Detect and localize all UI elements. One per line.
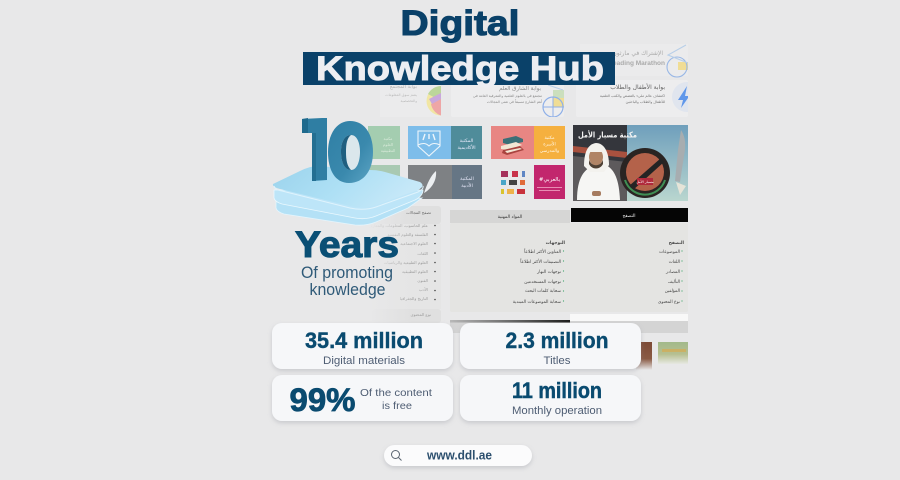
icon: lightning bolt bbox=[672, 82, 688, 112]
subheading: Of promoting knowledge bbox=[301, 264, 393, 299]
icon: circle chart marathon bbox=[667, 45, 688, 77]
panel: browse links: توجهات المستخدمين bbox=[524, 280, 562, 285]
faded top service cards: مجتمع في بالعلوم العلمية والمعرفية العامة في bbox=[473, 94, 542, 99]
platform bbox=[273, 166, 423, 225]
tile: academic library bbox=[408, 126, 482, 159]
numeral 10 bbox=[302, 118, 373, 183]
thumbnails row bbox=[636, 342, 688, 370]
lower tabs strip bbox=[450, 314, 688, 333]
tile: green partial bottom bbox=[368, 165, 400, 199]
faded top service cards: يضم سوق المعلومات bbox=[385, 93, 417, 97]
tile: green partial top bbox=[368, 126, 400, 159]
faded top service cards: للأطفال والطلاب والباحثين bbox=[626, 99, 665, 104]
tile: green partial top: التطبيقية bbox=[381, 148, 395, 153]
panel: browse links: الموضوعات bbox=[659, 250, 680, 255]
subheading: Of promoting knowledge: knowledge bbox=[310, 281, 386, 299]
card: 35.4 million digital materials: 35.4 million bbox=[305, 328, 423, 353]
card: 99% of the content is free: is free bbox=[382, 400, 412, 412]
card: 11 million monthly operation bbox=[460, 375, 641, 421]
tabs: التصفح bbox=[622, 214, 636, 219]
panel: browse links: التأليف bbox=[668, 278, 680, 285]
icon: circle chart history bbox=[543, 85, 564, 117]
icon: magnifier bbox=[392, 450, 402, 460]
tile: Hope Probe library: مكتبة مسبار الأمل bbox=[578, 130, 637, 140]
faded top service cards: Reading Marathon bbox=[608, 60, 665, 67]
panel: browse links: التصفح bbox=[669, 241, 685, 246]
card: 35.4 million digital materials: Digital materials bbox=[323, 355, 406, 367]
sidebar: subject list: علم الحاسوب، المعلومات والمعارف bbox=[368, 223, 428, 228]
panel: browse links: نوع المحتوى bbox=[658, 300, 680, 305]
panel: browse links: اللغات bbox=[669, 260, 680, 265]
card: 99% of the content is free bbox=[272, 375, 453, 421]
card: 2.3 million titles: Titles bbox=[544, 355, 571, 367]
tabs bbox=[450, 208, 688, 223]
panel: browse links: سحابة الموضوعات المبتدية bbox=[513, 300, 561, 305]
faded top service cards: اكتشاف عالم مليء بالقصص والكتب العلمية bbox=[600, 94, 665, 98]
title: Digital: Digital bbox=[400, 4, 520, 43]
panel: browse links: توجهات النهار bbox=[536, 270, 562, 275]
tile: green partial top: مكتبة bbox=[384, 136, 392, 141]
panel: browse links: التصنيفات الأكثر اطلاعاً bbox=[520, 258, 561, 265]
heading: Years: Years bbox=[295, 224, 399, 265]
card: 35.4 million digital materials bbox=[272, 323, 453, 369]
subheading: Of promoting knowledge: Of promoting bbox=[301, 264, 393, 282]
sidebar: subject list: العلوم الاجتماعية bbox=[400, 241, 428, 246]
faded top service cards: والتخصصية bbox=[401, 99, 417, 103]
tile: academic library: المكتبة bbox=[460, 138, 473, 144]
tile: family library: مكتبة bbox=[544, 135, 555, 141]
icon: 3D number 10 on platform bbox=[273, 118, 423, 225]
tile: family library: والمدرسي bbox=[540, 149, 559, 154]
sidebar: subject list: الفنون bbox=[417, 278, 428, 283]
sidebar: subject list: الأدب bbox=[419, 287, 428, 292]
sidebar: subject list bbox=[368, 204, 441, 324]
panel: browse links: سحابة كلمات البحث bbox=[525, 288, 561, 294]
tile: family library: الأسرة bbox=[543, 140, 556, 148]
tile: literary library: المكتبة bbox=[460, 176, 474, 182]
search bar: www.ddl.ae: www.ddl.ae bbox=[426, 448, 492, 462]
tile: literary library: الأدبية bbox=[461, 182, 473, 189]
sidebar: subject list: العلوم الطبيعية والرياضيات bbox=[384, 260, 428, 265]
title banner: Knowledge Hub: Knowledge Hub bbox=[316, 50, 604, 88]
tile: family library bbox=[491, 126, 565, 159]
panel: browse links: التوجهات bbox=[546, 241, 566, 246]
tile: academic library: الأكاديمية bbox=[457, 144, 476, 151]
tile: literary library bbox=[408, 165, 482, 199]
sidebar: subject list: نوع المحتوى bbox=[411, 312, 431, 317]
tile: green partial top: العلوم bbox=[383, 142, 393, 147]
panel: website screenshot bbox=[368, 44, 702, 370]
card: 2.3 million titles: 2.3 million bbox=[506, 328, 608, 353]
panel: browse links: المصادر bbox=[665, 270, 680, 275]
panel: browse links: العناوين الأكثر اطلاعاً bbox=[524, 248, 561, 255]
tabs: المواد المهنية bbox=[498, 215, 522, 220]
panel: browse links: المؤلفين bbox=[665, 289, 680, 294]
icon: pie chart bbox=[426, 86, 441, 116]
tile: Arabic apps bbox=[501, 165, 565, 199]
sidebar: subject list: العلوم التطبيقية bbox=[402, 269, 428, 274]
tile: Hope Probe library: مسبار الأمل bbox=[636, 179, 654, 184]
sidebar: subject list: اللغات bbox=[417, 251, 428, 256]
tile: Arabic apps: ‎#بالعربي bbox=[539, 177, 561, 183]
card: 99% of the content is free: Of the content bbox=[360, 387, 432, 399]
panel: browse links bbox=[450, 223, 688, 312]
faded top service cards: بوابة الشارق العلم bbox=[499, 86, 541, 92]
faded top service cards: بوابة المجتمع bbox=[390, 84, 417, 90]
card: 99% of the content is free: 99% bbox=[290, 382, 356, 418]
faded top service cards: أهم الشارع مسبقاً في شتى المجالات bbox=[487, 99, 542, 104]
faded top service cards: بوابة الأطفال والطلاب bbox=[610, 83, 665, 91]
search bar: www.ddl.ae bbox=[384, 445, 532, 466]
faded top service cards bbox=[380, 44, 688, 117]
sidebar: subject list: التاريخ والجغرافيا bbox=[400, 296, 428, 301]
card: 11 million monthly operation: Monthly operation bbox=[512, 405, 602, 417]
card: 2.3 million titles bbox=[460, 323, 641, 369]
card: 11 million monthly operation: 11 million bbox=[512, 378, 602, 403]
faded top service cards: الإشتراك في مارثون bbox=[612, 50, 663, 57]
sidebar: subject list: الفلسفة والعلوم النفسية bbox=[388, 232, 428, 237]
tile: Hope Probe library bbox=[573, 125, 688, 201]
sidebar: subject list: تصفح المجالات bbox=[406, 210, 431, 215]
